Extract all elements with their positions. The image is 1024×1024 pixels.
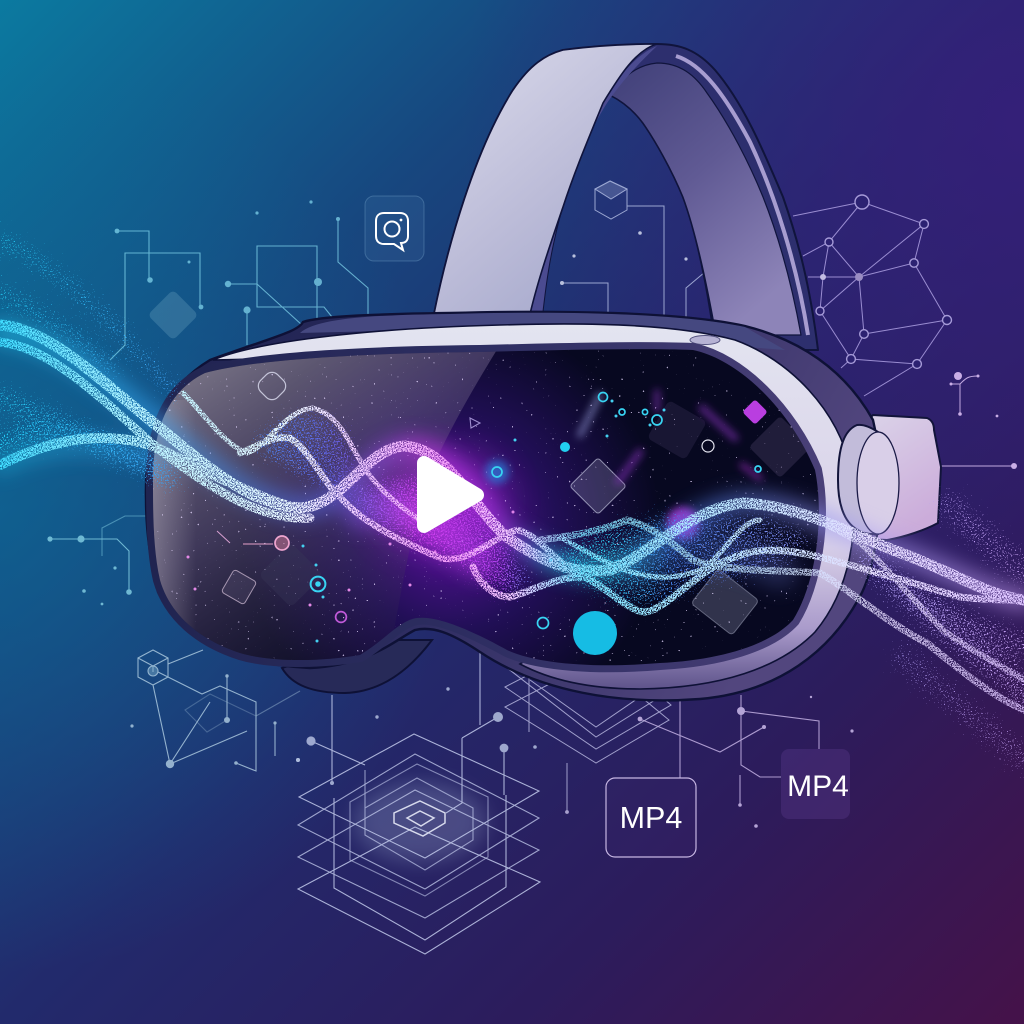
screen: purple and lavender streaks: [580, 392, 760, 482]
screen: star field: [153, 349, 818, 662]
layered hexagon stack: [296, 650, 540, 954]
MP4 tag: filled: [781, 749, 850, 819]
glass diamond: upper left: [148, 290, 198, 340]
data wave: bright particle strands: [0, 325, 1024, 710]
network graph: upper right: [793, 195, 952, 396]
strap: dark rim: [530, 46, 657, 316]
screen: dark glass panels: [258, 400, 811, 608]
strap: back inner face: [610, 63, 801, 335]
headset chin piece: [282, 640, 432, 693]
data wave: particle clouds and ribbons: [0, 235, 1024, 770]
headset side module: rear block: [850, 415, 941, 540]
data wave: soft colour glow: [0, 332, 1024, 600]
strap: dark silhouette: [434, 44, 818, 350]
hex cube and polygon network: lower left: [130, 650, 300, 771]
screen: left edge sheen: [153, 400, 190, 626]
headset side module: front cap: [838, 425, 899, 534]
cube outline and circuit: top center: [560, 181, 705, 318]
screen: magenta cube: [744, 400, 766, 424]
circuit lines: left: [47, 516, 148, 605]
hexagon core: [394, 801, 445, 836]
screen: purple orb: [667, 507, 699, 539]
screen: glass diamond: [570, 458, 626, 514]
headset top lip: [300, 313, 785, 350]
screen: rings and markers: [217, 369, 761, 628]
MP4 tag: outlined: MP4: [620, 801, 682, 835]
headset screen: [153, 349, 819, 666]
small circuit node: right: [941, 372, 1017, 469]
app icon tile with chat camera glyph: [365, 196, 424, 261]
play button: [424, 463, 477, 526]
screen: cyan orb: [573, 611, 617, 655]
screen: glowing ring: [485, 460, 509, 484]
side module: dial: [857, 432, 899, 534]
second layered stack under headset: [505, 620, 671, 814]
MP4 tag: outlined: [606, 778, 696, 857]
head strap: [434, 44, 818, 350]
glow behind layered hexagon stack: [354, 782, 486, 862]
headset light band: [213, 324, 854, 689]
circuit lines to MP4 tags: [638, 695, 854, 828]
screen: glass panel lower right: [691, 569, 759, 635]
circuit lines: upper left: [110, 200, 368, 360]
headset shell: [146, 312, 880, 700]
strap: light front face: [434, 44, 657, 314]
headset inner dark ring: [153, 349, 819, 665]
strap: light rim: [676, 56, 808, 335]
screen: glass reflection: [153, 352, 496, 660]
screen: small cyan dot: [560, 442, 570, 452]
headset top button: [690, 336, 720, 344]
screen: purple glow: [380, 455, 500, 545]
screen: scattered dots: [188, 401, 664, 641]
MP4 tag: filled: MP4: [787, 770, 849, 803]
